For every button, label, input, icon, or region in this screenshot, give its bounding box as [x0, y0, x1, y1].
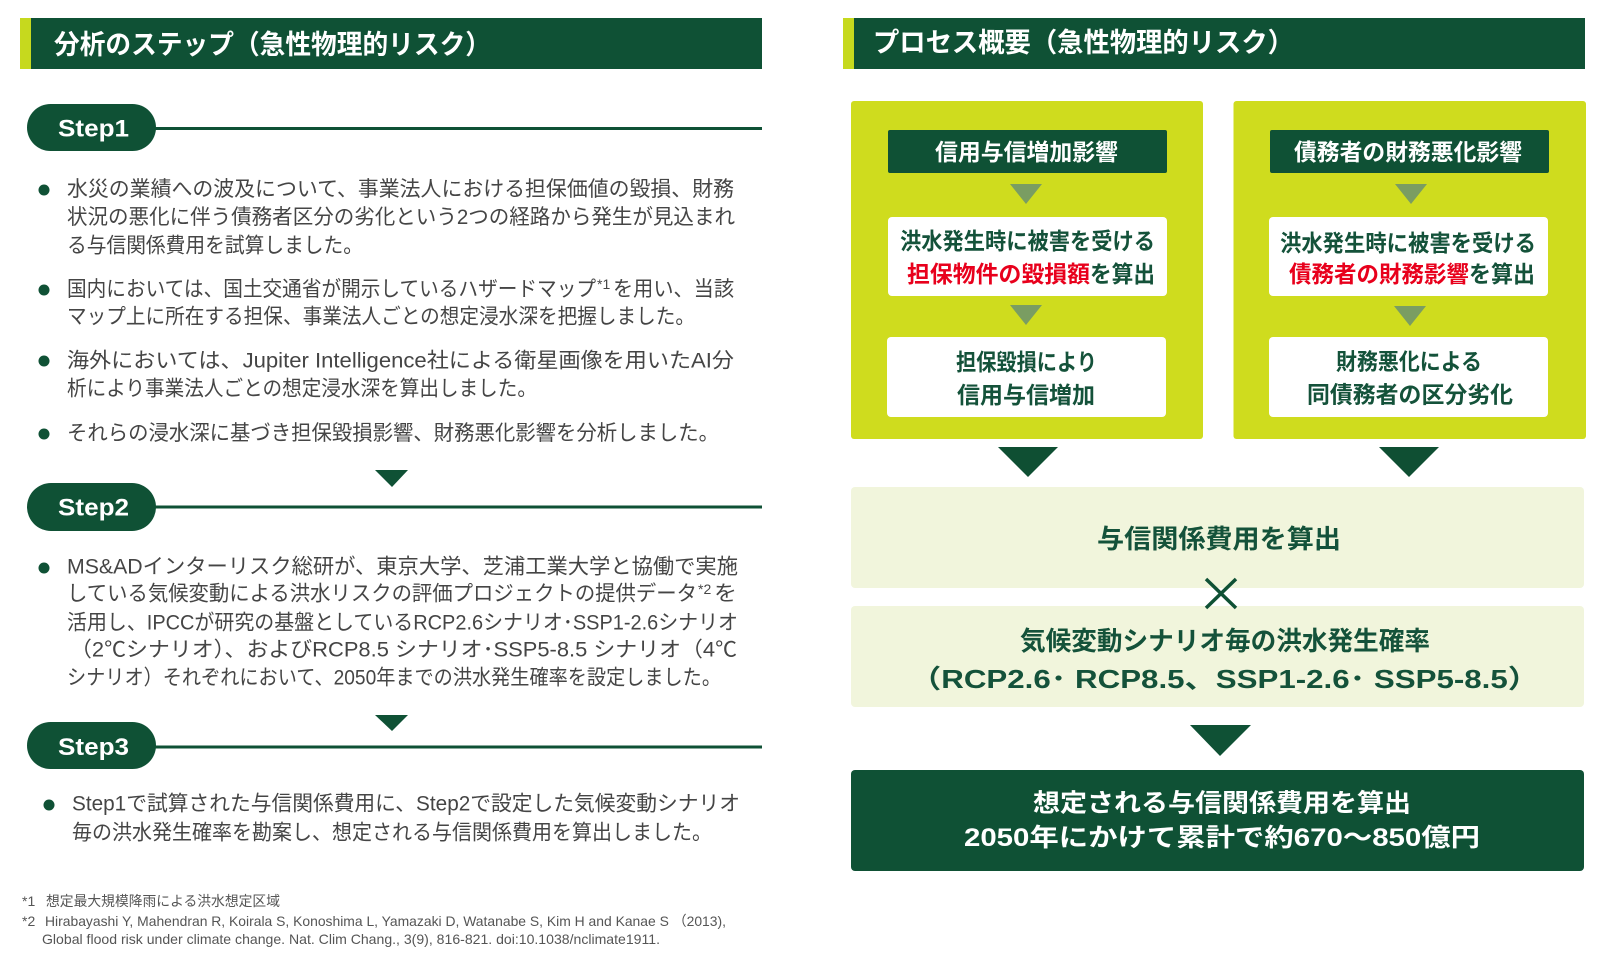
- step 1 text block: 水災の業績への波及について、事業法人における担保価値の毀損、財務: [67, 178, 734, 201]
- step 2 text block: している気候変動による洪水リスクの評価プロジェクトの提供データ: [67, 582, 697, 606]
- box: damage calculation: 担保物件の毀損額: [907, 261, 1090, 287]
- box: damage calculation: [888, 217, 1167, 296]
- footnotes: *1: [22, 893, 35, 909]
- box: result: 担保毀損により: [956, 349, 1097, 375]
- footnotes: 想定最大規模降雨による洪水想定区域: [46, 893, 280, 909]
- step 2 text block: 活用し、IPCCが研究の基盤としているRCP2.6シナリオ･SSP1-2.6シナリオ: [67, 612, 738, 634]
- heading: process overview: プロセス概要（急性物理的リスク）: [873, 28, 1294, 58]
- step 2 header: Step2: [58, 494, 129, 522]
- box: financial impact calculation: [1269, 217, 1548, 296]
- arrow: step 2 to step 3: [375, 715, 408, 731]
- box: financial impact calculation: を算出: [1469, 261, 1535, 287]
- footnotes: *2: [22, 913, 35, 929]
- box: result: [1269, 337, 1548, 417]
- box: damage calculation: を算出: [1090, 261, 1155, 287]
- step 3 text block: [44, 792, 740, 844]
- step 1 text block: それらの浸水深に基づき担保毀損影響、財務悪化影響を分析しました。: [67, 422, 719, 445]
- footnotes: Global flood risk under climate change. Nat. Clim Chang., 3(9), 816-821. doi:10.1038/nclimate1911.: [42, 931, 660, 947]
- box: result: [887, 337, 1166, 417]
- step 1 text block: を用い、当該: [613, 278, 734, 301]
- step 1 text block: 国内においては、国土交通省が開示しているハザードマップ: [67, 278, 596, 301]
- step 3 text block: 毎の洪水発生確率を勘案し、想定される与信関係費用を算出しました。: [72, 822, 712, 844]
- box: financial impact calculation: 債務者の財務影響: [1289, 261, 1469, 287]
- box: damage calculation: 洪水発生時に被害を受ける: [900, 228, 1155, 254]
- box: final result: [851, 770, 1584, 871]
- arrow: [1395, 184, 1427, 204]
- heading: process overview: [843, 18, 1585, 69]
- arrow: step 1 to step 2: [375, 470, 408, 487]
- box: financial impact calculation: 洪水発生時に被害を受ける: [1280, 230, 1536, 256]
- heading: analysis steps: [20, 18, 762, 69]
- box: final result: 想定される与信関係費用を算出: [1033, 790, 1411, 818]
- panel title: [888, 130, 1167, 173]
- step 3 text block: Step1で試算された与信関係費用に、Step2で設定した気候変動シナリオ: [72, 792, 740, 816]
- footnotes: Hirabayashi Y, Mahendran R, Koirala S, Konoshima L, Yamazaki D, Watanabe S, Kim H and Kanae S （2013),: [45, 913, 726, 929]
- step 3 header: Step3: [58, 734, 129, 761]
- step 2 text block: を: [714, 582, 737, 606]
- arrow: right panel down: [1379, 447, 1439, 477]
- box: final result: 2050年にかけて累計で約670～850億円: [964, 824, 1480, 852]
- step 1 text block: る与信関係費用を試算しました。: [67, 234, 363, 258]
- panel title: [1270, 130, 1549, 173]
- step 1 header: [27, 104, 762, 151]
- step 1 header: Step1: [58, 116, 129, 142]
- panel title: 債務者の財務悪化影響: [1294, 139, 1522, 165]
- step 1 text block: マップ上に所在する担保、事業法人ごとの想定浸水深を把握しました。: [67, 306, 695, 328]
- step 2 header: [27, 483, 762, 531]
- step 2 text block: [38, 556, 738, 690]
- box: flood probability by scenario: 気候変動シナリオ毎の洪水発生確率: [1020, 626, 1430, 656]
- arrow: [1394, 306, 1426, 326]
- step 3 header: [27, 722, 762, 769]
- icon: multiplication sign: [1206, 579, 1236, 608]
- panel title: 信用与信増加影響: [935, 139, 1118, 165]
- step 2 text block: MS&ADインターリスク総研が、東京大学、芝浦工業大学と協働で実施: [67, 556, 738, 578]
- box: result: 財務悪化による: [1336, 348, 1482, 374]
- heading: analysis steps: 分析のステップ（急性物理的リスク）: [54, 30, 491, 60]
- step 2 text block: シナリオ）それぞれにおいて、2050年までの洪水発生確率を設定しました。: [67, 666, 721, 690]
- footnotes: [22, 893, 726, 947]
- step 1 text block: 状況の悪化に伴う債務者区分の劣化という2つの経路から発生が見込まれ: [67, 206, 735, 229]
- box: credit cost calculation: 与信関係費用を算出: [1097, 524, 1341, 554]
- arrow: [1010, 184, 1042, 204]
- step 1 text block: [38, 178, 735, 445]
- arrow: to result: [1190, 725, 1251, 756]
- box: result: 同債務者の区分劣化: [1307, 382, 1513, 408]
- box: result: 信用与信増加: [957, 382, 1095, 408]
- panel: credit exposure increase impact: [851, 101, 1203, 439]
- step 1 text block: 析により事業法人ごとの想定浸水深を算出しました。: [67, 378, 537, 400]
- arrow: [1010, 305, 1042, 325]
- step 1 text block: 海外においては、Jupiter Intelligence社による衛星画像を用いたAI分: [67, 350, 734, 372]
- box: credit cost calculation: [851, 487, 1584, 588]
- box: flood probability by scenario: （RCP2.6･ RCP8.5、SSP1-2.6･ SSP5-8.5）: [910, 664, 1539, 694]
- step 2 text block: *2: [698, 581, 711, 597]
- arrow: left panel down: [998, 447, 1058, 477]
- panel: obligor financial deterioration impact: [1234, 101, 1586, 439]
- box: flood probability by scenario: [851, 606, 1584, 707]
- step 2 text block: （2℃シナリオ）、およびRCP8.5 シナリオ･SSP5-8.5 シナリオ（4℃: [70, 638, 737, 662]
- step 1 text block: *1: [597, 276, 610, 292]
